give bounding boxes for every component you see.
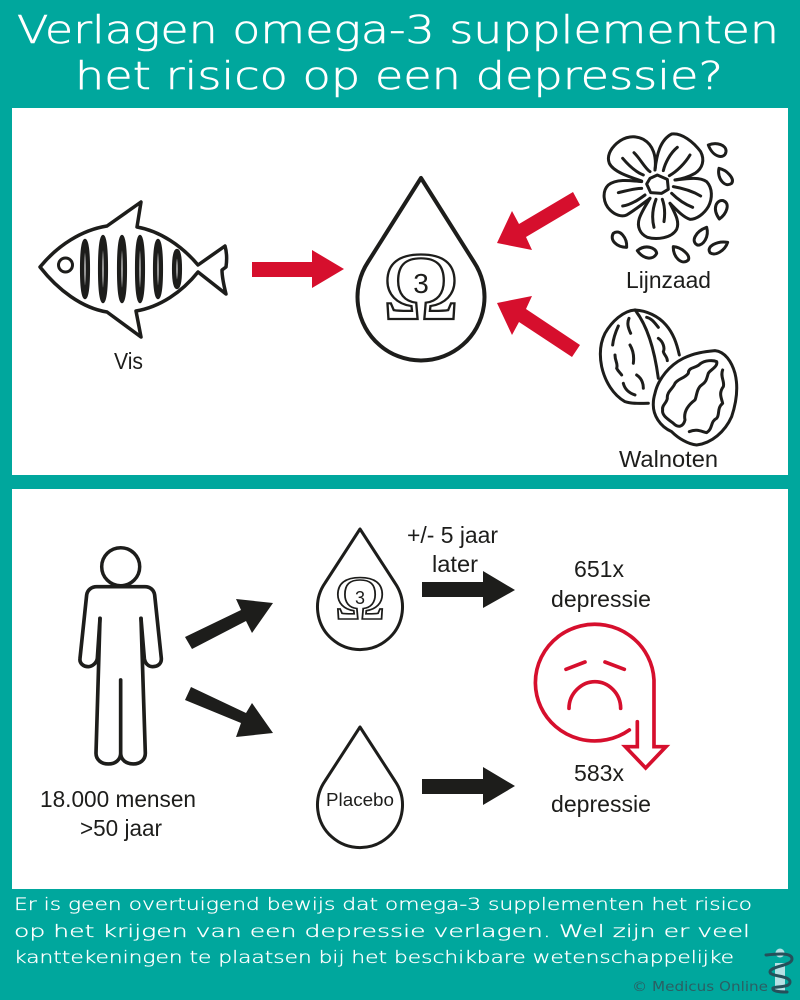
panel: study design	[12, 489, 788, 889]
label: 651x depressie	[551, 556, 651, 612]
arrow: walnut to drop	[497, 296, 580, 357]
icon: omega-3 drop small: Ω	[334, 564, 386, 633]
arrow: to omega-3 group	[185, 599, 273, 649]
arrow: omega-3 result	[422, 571, 515, 608]
label: 583x depressie: depressie	[551, 791, 651, 817]
icon: person	[80, 548, 161, 764]
icon: omega-3 drop small	[318, 529, 402, 650]
icon: omega-3 drop	[358, 178, 484, 360]
conclusion text: Er is geen overtuigend bewijs dat omega-3 supplementen het risico	[14, 895, 752, 915]
label: participants: 18.000 mensen	[40, 786, 196, 812]
credit: © Medicus Online	[632, 980, 768, 995]
title: Verlagen omega-3 supplementen	[17, 8, 779, 52]
icon: medicus logo	[766, 948, 792, 992]
label: Vis: Vis	[114, 348, 143, 374]
icon: flax flower and seeds	[604, 134, 732, 262]
panel: omega-3 sources	[12, 108, 788, 475]
label: participants: >50 jaar	[80, 815, 162, 841]
arrow: to placebo group	[185, 687, 273, 737]
label: time span	[407, 522, 498, 577]
label: Lijnzaad: Lijnzaad	[626, 267, 711, 293]
icon: sad face with down arrow	[535, 624, 666, 768]
label: time span: later	[432, 551, 478, 577]
label: Walnoten: Walnoten	[619, 446, 718, 472]
title	[17, 8, 779, 98]
arrow: flax to drop	[497, 192, 580, 250]
icon: omega-3 drop: Ω	[382, 232, 460, 340]
conclusion text	[14, 895, 752, 968]
label: time span: +/- 5 jaar	[407, 522, 498, 548]
label: 651x depressie: depressie	[551, 586, 651, 612]
icon: placebo drop	[318, 727, 402, 848]
label: 651x depressie: 651x	[574, 556, 625, 582]
icon: walnuts	[600, 310, 737, 445]
label: participants	[40, 786, 196, 841]
conclusion text: kanttekeningen te plaatsen bij het beschikbare wetenschappelijke	[14, 948, 734, 968]
icon: omega-3 drop small: 3	[355, 588, 365, 608]
label: 583x depressie	[551, 760, 651, 817]
icon: omega-3 drop: 3	[413, 268, 429, 299]
title: het risico op een depressie?	[75, 54, 723, 98]
icon: placebo drop: Placebo	[326, 790, 394, 810]
label: 583x depressie: 583x	[574, 760, 625, 786]
arrow: placebo result	[422, 767, 515, 805]
conclusion text: op het krijgen van een depressie verlagen. Wel zijn er veel	[14, 922, 750, 942]
icon: fish	[40, 202, 227, 337]
arrow: fish to drop	[252, 250, 344, 288]
